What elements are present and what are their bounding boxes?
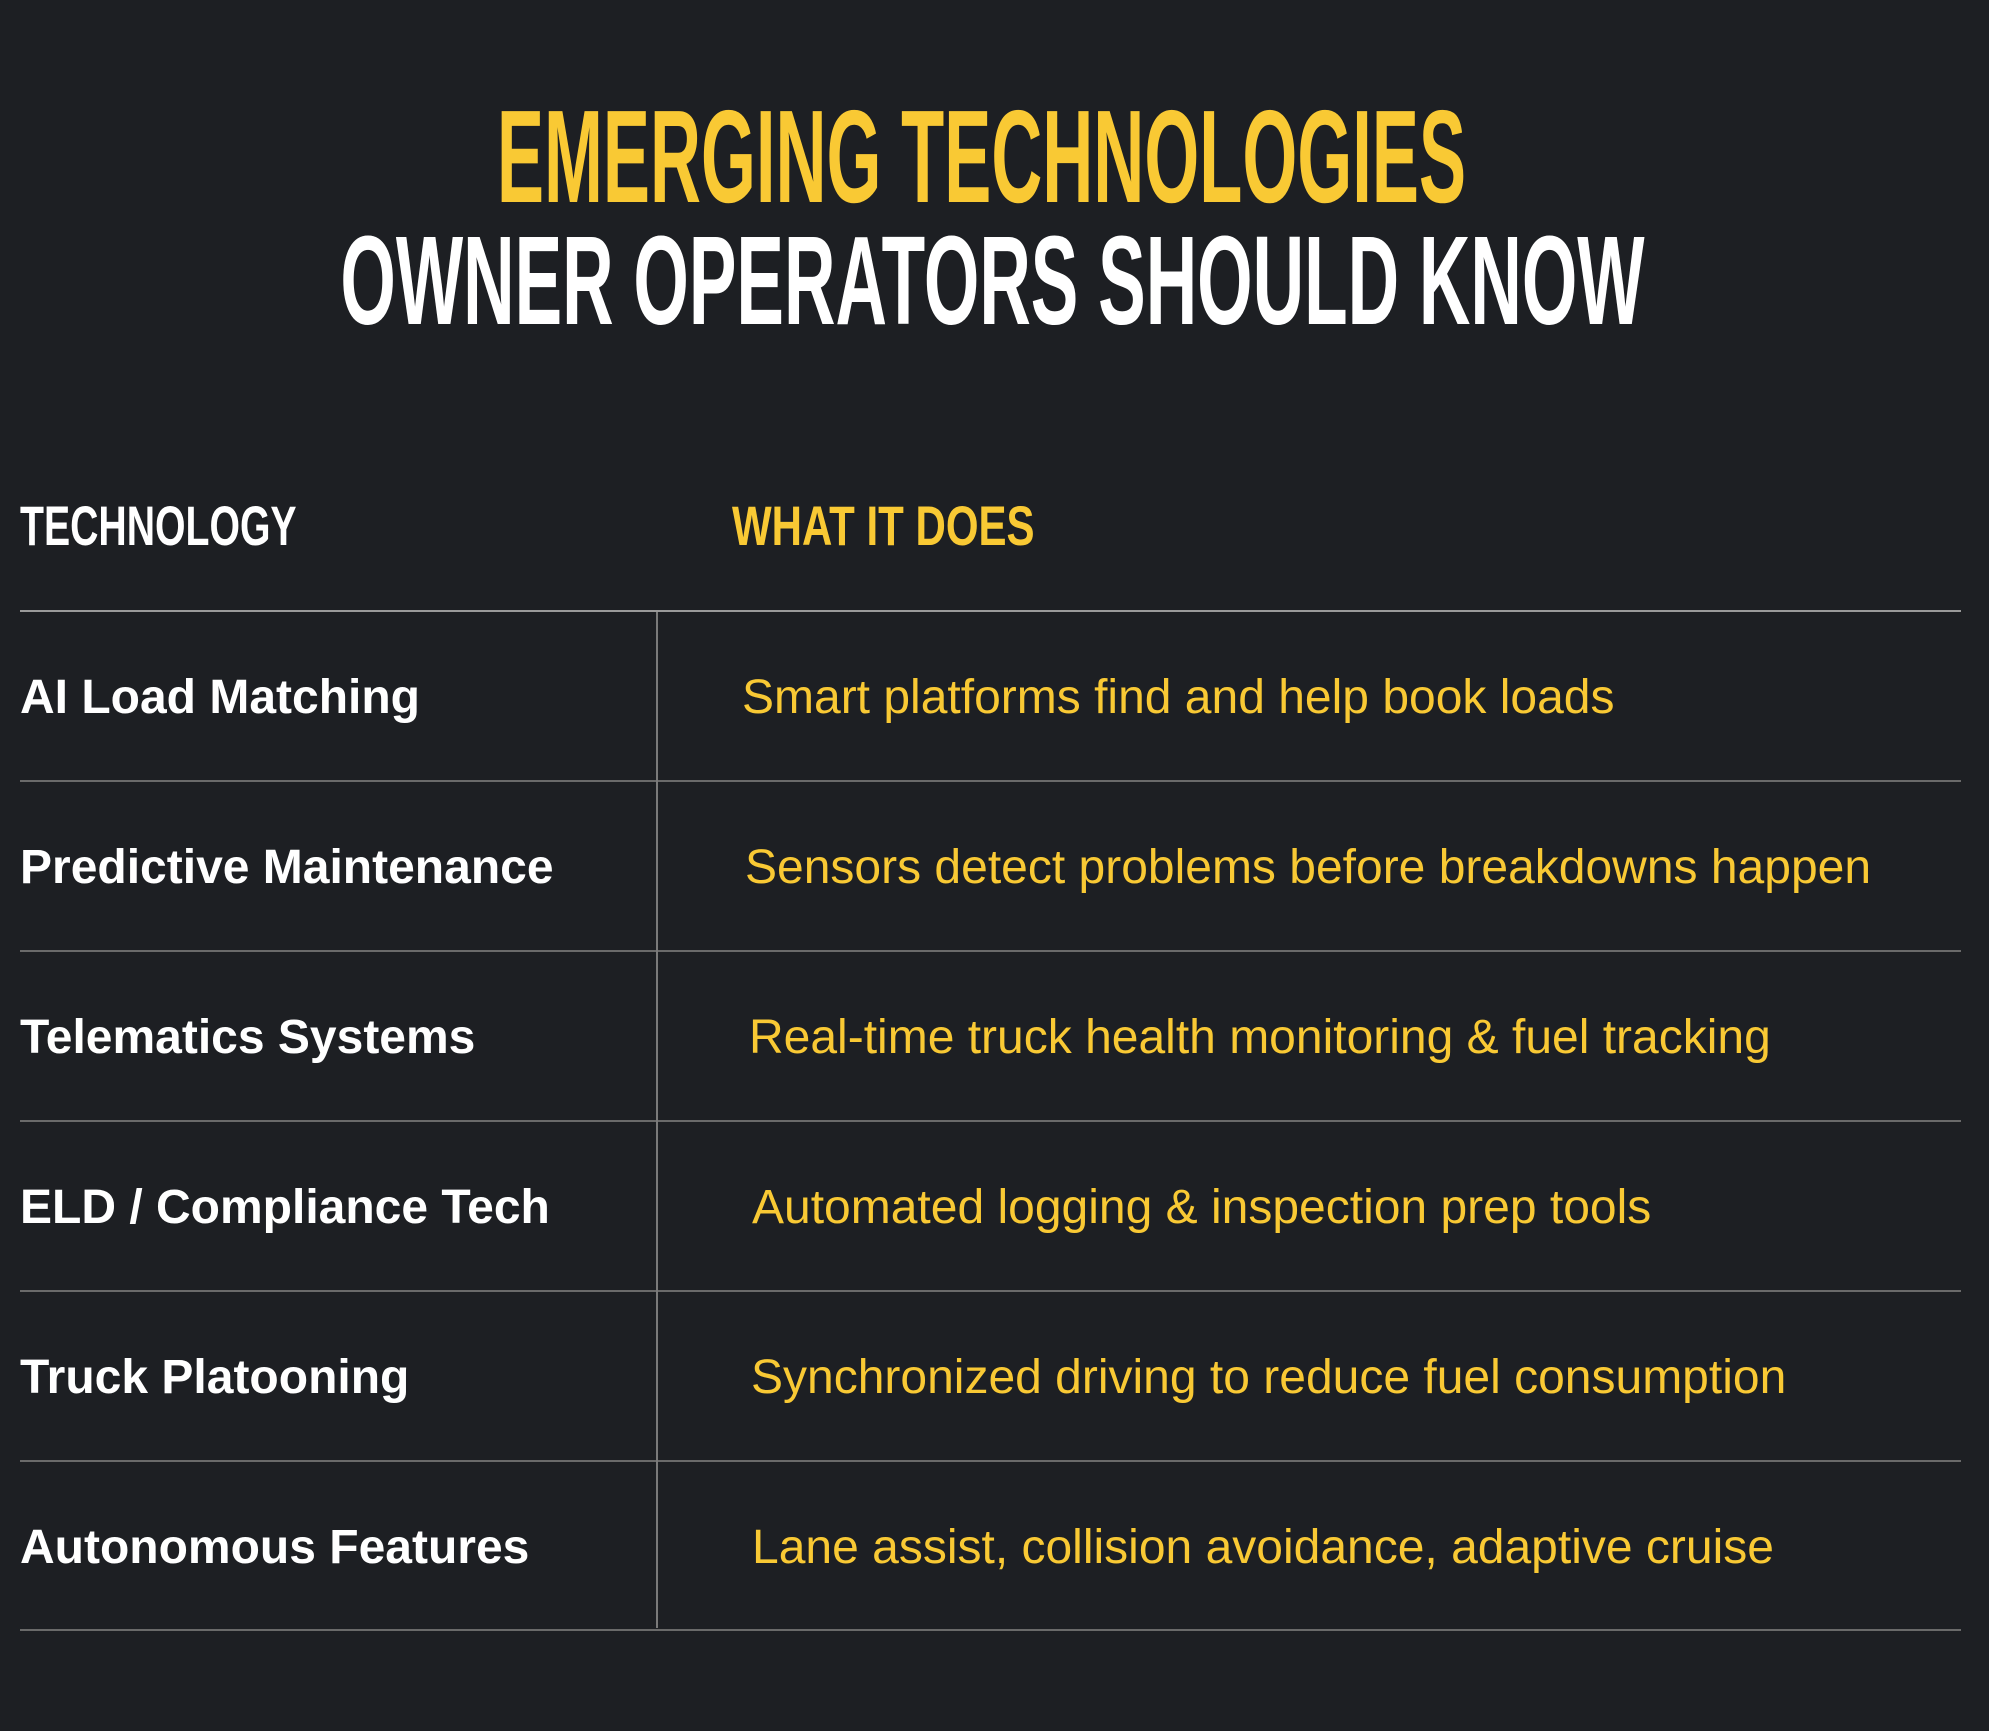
row 6: Lane assist, collision avoidance, adaptive cruise [752, 1521, 1774, 1574]
title [340, 83, 1645, 351]
row 2: Sensors detect problems before breakdowns happen [745, 841, 1871, 894]
row 1 [20, 671, 1614, 724]
row 5 [20, 1351, 1786, 1404]
row 2 [20, 841, 1871, 894]
row 4: Automated logging & inspection prep tools [752, 1181, 1651, 1234]
header: technology: TECHNOLOGY [20, 494, 297, 557]
row 6: Autonomous Features [20, 1521, 529, 1574]
row 3: Real-time truck health monitoring & fuel tracking [749, 1011, 1771, 1064]
row 2: Predictive Maintenance [20, 841, 554, 894]
header: what it does: WHAT IT DOES [732, 494, 1035, 557]
row 5: Truck Platooning [20, 1351, 409, 1404]
row 4: ELD / Compliance Tech [20, 1181, 550, 1234]
row 1: Smart platforms find and help book loads [742, 671, 1614, 724]
row 6 [20, 1521, 1774, 1574]
title line 1: EMERGING TECHNOLOGIES [497, 83, 1466, 230]
row 5: Synchronized driving to reduce fuel consumption [751, 1351, 1786, 1404]
row 3 [20, 1011, 1771, 1064]
title line 2: OWNER OPERATORS SHOULD KNOW [340, 210, 1645, 351]
row 4 [20, 1181, 1651, 1234]
row 3: Telematics Systems [20, 1011, 475, 1064]
row 1: AI Load Matching [20, 671, 420, 724]
